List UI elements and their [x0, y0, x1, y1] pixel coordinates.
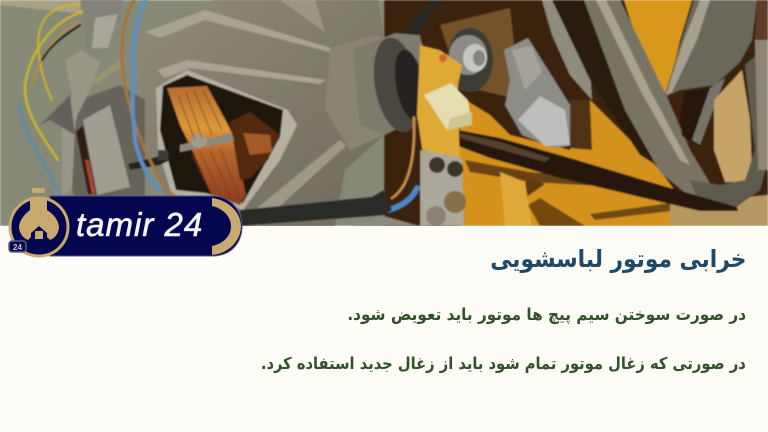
- drive belt: [384, 0, 738, 211]
- pulley wheel: [584, 0, 768, 208]
- orange tub panels: [458, 0, 768, 226]
- paragraph 2: در صورتی که زغال موتور تمام شود باید از زغال جدید استفاده کرد.: [261, 354, 746, 373]
- stator laminations: [76, 105, 130, 195]
- badge right gold arc: [212, 198, 241, 255]
- metal bracket with screws: [420, 150, 466, 226]
- photo: washing machine motor: [0, 0, 768, 226]
- paragraph 1: در صورت سوختن سیم پیچ ها موتور باید تعویض شود.: [347, 305, 746, 324]
- stator frame: [40, 0, 160, 226]
- hub and shaft: [353, 28, 493, 136]
- logo text: tamir 24: [76, 206, 203, 243]
- logo badge: tamir 24: [8, 188, 242, 258]
- logo circle: 24: [13, 243, 22, 252]
- badge navy pill: [50, 196, 242, 256]
- lint and fluff: [504, 38, 592, 150]
- yellow sensor board and capacitor: [417, 45, 472, 160]
- logo circle: [9, 188, 68, 256]
- small dark pulley: [542, 0, 664, 170]
- orange and blue wires at bracket: [388, 118, 417, 210]
- background wall and surroundings: [0, 0, 768, 226]
- title: خرابی موتور لباسشویی: [490, 245, 746, 273]
- yellow and blue wires: [20, 0, 174, 195]
- copper winding window: [156, 70, 297, 210]
- cable tie: [128, 150, 170, 170]
- motor body casting: [142, 0, 384, 226]
- black cable: [240, 190, 392, 226]
